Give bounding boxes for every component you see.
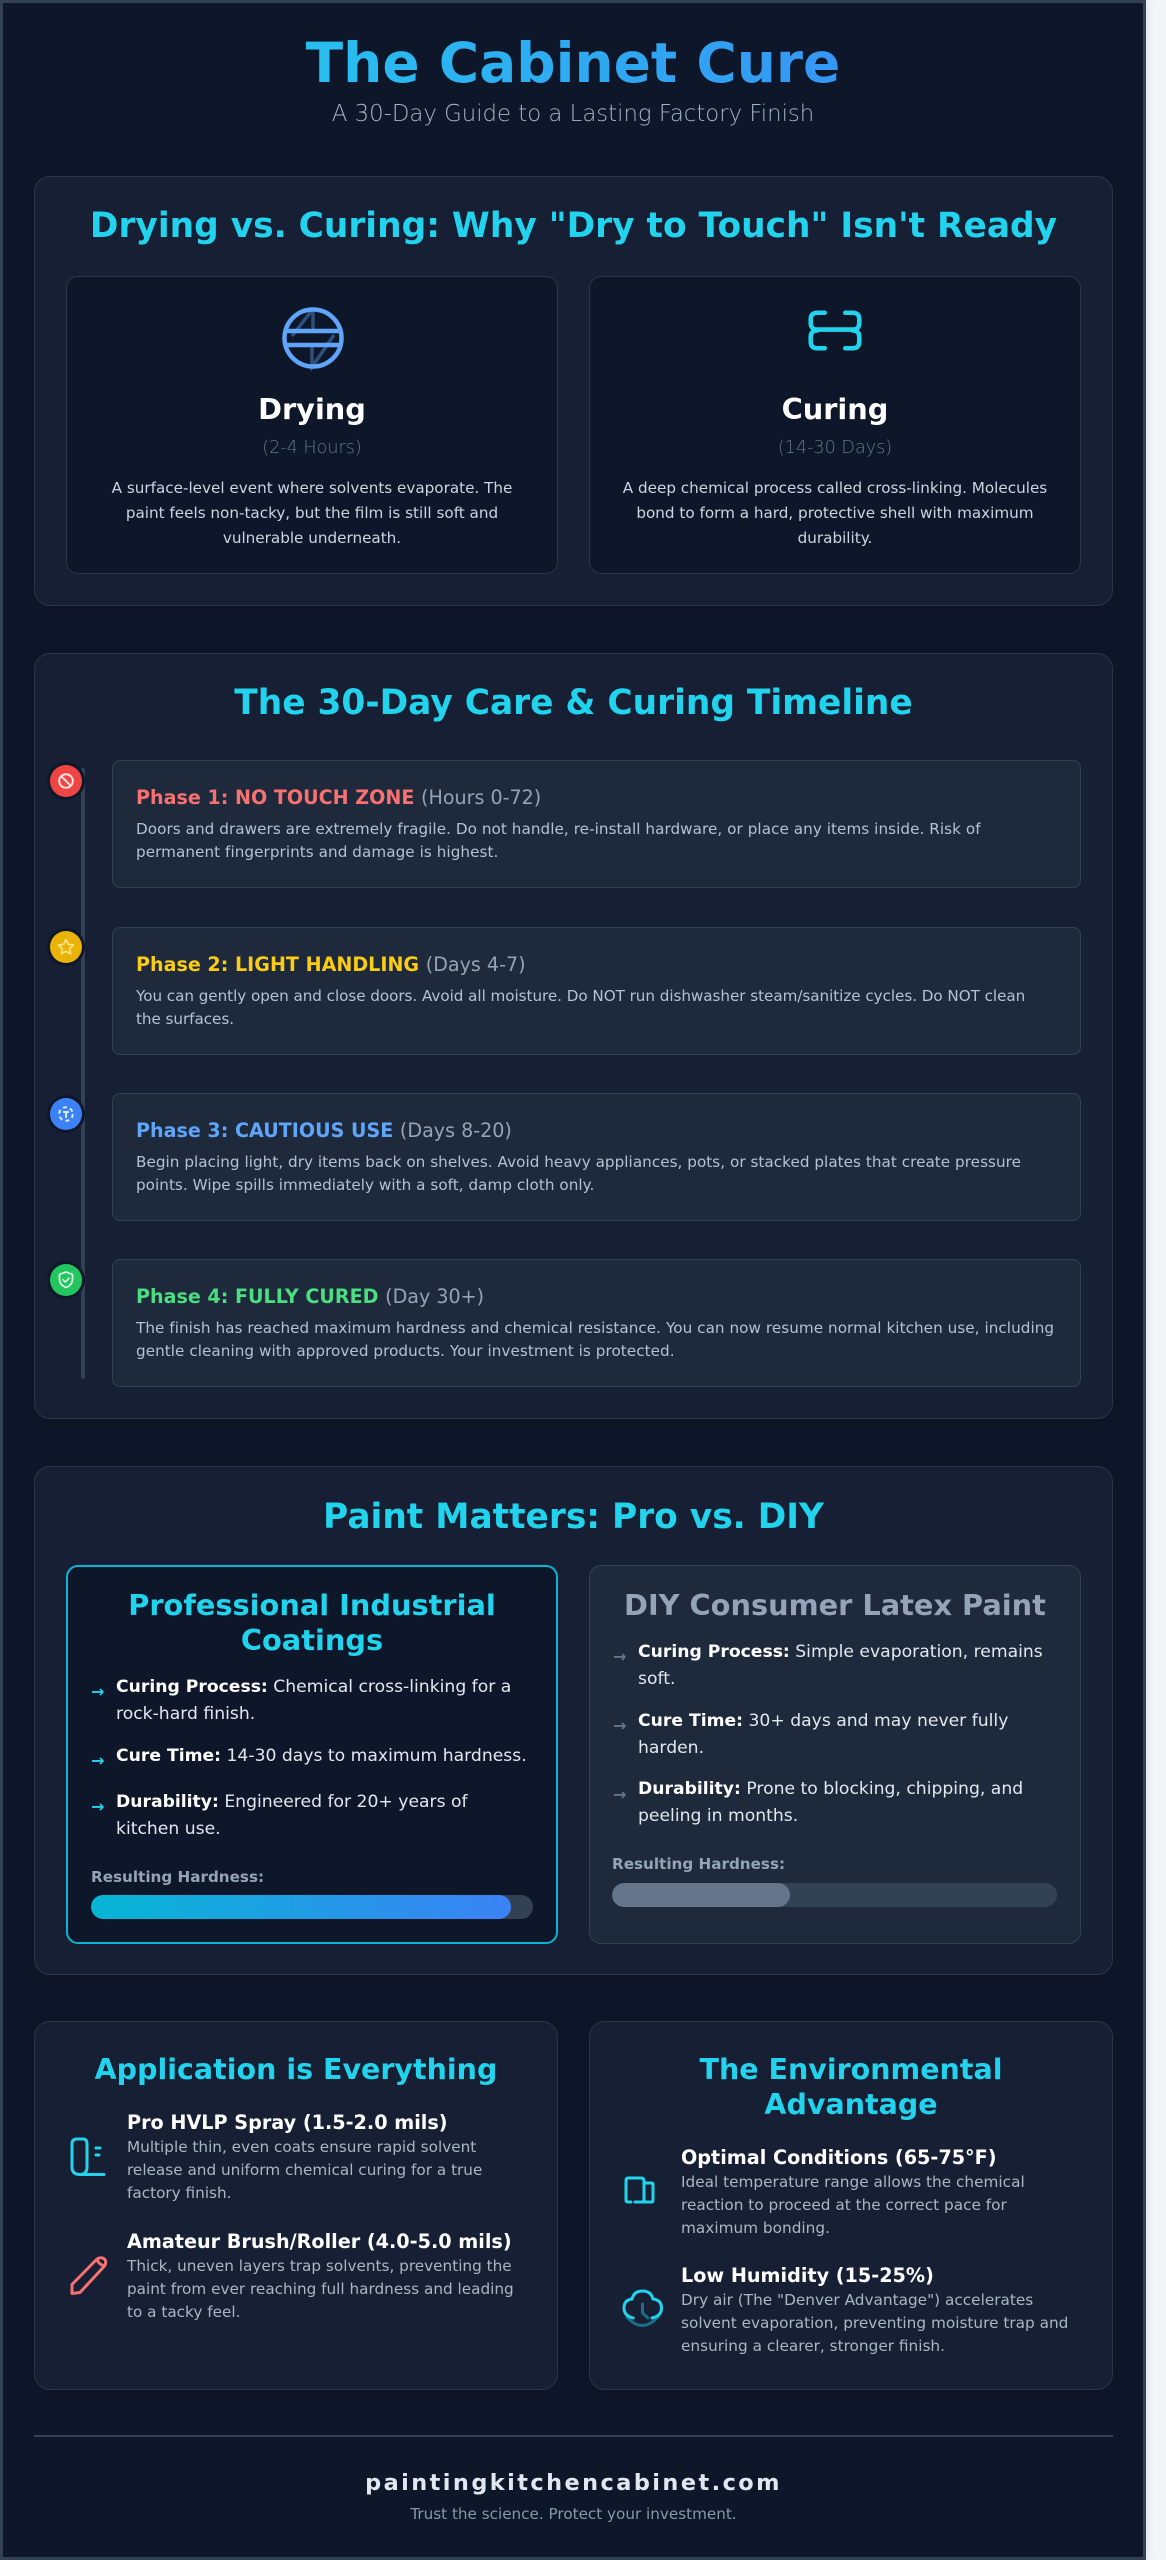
phase 2 title: Phase 2: LIGHT HANDLING (Days 4-7) <box>136 953 526 976</box>
phase 2 dot <box>50 931 82 963</box>
phase 1 text: Doors and drawers are extremely fragile. Do not handle, re-install hardware, or place any items inside. Risk of <box>136 820 981 838</box>
item text: amateur brush: to a tacky feel. <box>127 2303 240 2321</box>
bullet 1 text <box>116 1677 511 1724</box>
phase 3 text: points. Wipe spills immediately with a soft, damp cloth only. <box>136 1176 594 1194</box>
bullet 3 text: peeling in months. <box>638 1806 798 1826</box>
subtitle: A 30-Day Guide to a Lasting Factory Finish <box>332 101 814 127</box>
bullet 1 text: Curing Process: Simple evaporation, remains <box>638 1642 1043 1662</box>
item text: low humidity <box>681 2291 1068 2355</box>
item: low humidity: Low Humidity (15-25%) <box>681 2264 934 2287</box>
description: curing <box>622 479 1047 547</box>
heading: drying vs curing: Drying vs. Curing: Why "Dry to Touch" Isn't Ready <box>90 206 1057 246</box>
item text: pro HVLP: factory finish. <box>127 2184 232 2202</box>
heading: timeline: The 30-Day Care & Curing Timeline <box>234 683 913 723</box>
heading: environment: The Environmental <box>700 2053 1002 2086</box>
item text: optimal conditions: Ideal temperature range allows the chemical <box>681 2173 1025 2191</box>
item text: optimal conditions <box>681 2173 1025 2237</box>
bullet 3 text: kitchen use. <box>116 1819 221 1839</box>
description: drying <box>112 479 512 547</box>
panel: timeline <box>34 653 1113 1419</box>
item text: amateur brush <box>126 2257 514 2321</box>
footer site name: paintingkitchencabinet.com <box>365 2470 782 2496</box>
phase 1 title: Phase 1: NO TOUCH ZONE (Hours 0-72) <box>136 786 541 809</box>
phase 3 dot <box>50 1098 82 1130</box>
description: drying: paint feels non-tacky, but the film is still soft and <box>126 504 498 522</box>
card: drying <box>66 276 558 574</box>
phase 3 text: Begin placing light, dry items back on shelves. Avoid heavy appliances, pots, or stacked plates that create pressure <box>136 1153 1021 1171</box>
item text: low humidity: Dry air (The "Denver Advantage") accelerates <box>681 2291 1033 2309</box>
hardness fill 95% <box>91 1895 511 1919</box>
label: curing: Curing <box>782 392 888 426</box>
icon: dashed circle <box>58 1106 74 1122</box>
icon: cloud <box>622 2290 663 2327</box>
bullet 2: → <box>613 1716 626 1735</box>
item text: amateur brush: Thick, uneven layers trap solvents, preventing the <box>127 2257 512 2275</box>
item: optimal conditions: Optimal Conditions (65-75°F) <box>681 2146 997 2169</box>
bullet 1: → <box>91 1682 104 1701</box>
phase 2 text <box>136 987 1025 1028</box>
phase 4 card <box>112 1259 1081 1387</box>
icon: brush <box>70 2256 108 2295</box>
item: pro HVLP: Pro HVLP Spray (1.5-2.0 mils) <box>127 2111 448 2134</box>
item text: pro HVLP <box>127 2138 482 2202</box>
title: The Cabinet Cure <box>306 31 840 95</box>
item text: optimal conditions: maximum bonding. <box>681 2219 830 2237</box>
heading: professional: Professional Industrial <box>128 1588 496 1622</box>
description: curing: durability. <box>798 529 872 547</box>
hardness bar: professional <box>91 1895 533 1919</box>
bullet 3 text <box>638 1779 1023 1826</box>
heading: environment <box>700 2053 1002 2121</box>
timeline line <box>81 768 85 1379</box>
heading: professional: Coatings <box>241 1623 383 1657</box>
icon: drying <box>282 307 344 371</box>
bullet 3 text: Durability: Engineered for 20+ years of <box>116 1792 468 1812</box>
icon: spray <box>70 2138 106 2176</box>
heading: paint matters: Paint Matters: Pro vs. DIY <box>323 1497 824 1537</box>
card: curing <box>589 276 1081 574</box>
icon: star <box>58 938 74 955</box>
footer divider <box>34 2435 1113 2437</box>
bullet 1: → <box>613 1647 626 1666</box>
panel: application <box>34 2021 558 2390</box>
phase 2 card <box>112 927 1081 1055</box>
heading: environment: Advantage <box>764 2088 938 2121</box>
item text: pro HVLP: release and uniform chemical curing for a true <box>127 2161 482 2179</box>
bullet 3 text: Durability: Prone to blocking, chipping, and <box>638 1779 1023 1799</box>
icon: no entry <box>58 773 74 789</box>
phase 4 title: Phase 4: FULLY CURED (Day 30+) <box>136 1285 484 1308</box>
icon: curing <box>808 310 862 350</box>
item text: pro HVLP: Multiple thin, even coats ensure rapid solvent <box>127 2138 476 2156</box>
bullet 2 text <box>638 1711 1008 1758</box>
hardness label: DIY: Resulting Hardness: <box>612 1855 785 1873</box>
label: drying: Drying <box>258 392 366 426</box>
description: curing: bond to form a hard, protective shell with maximum <box>636 504 1034 522</box>
duration: drying: (2-4 Hours) <box>262 438 362 458</box>
description: curing: A deep chemical process called cross-linking. Molecules <box>623 479 1047 497</box>
phase 4 text <box>136 1319 1054 1360</box>
description: drying: vulnerable underneath. <box>223 529 401 547</box>
bullet 2 text: harden. <box>638 1738 704 1758</box>
duration: curing: (14-30 Days) <box>778 438 892 458</box>
hardness bar: DIY <box>612 1883 1057 1907</box>
item: amateur brush: Amateur Brush/Roller (4.0-5.0 mils) <box>127 2230 512 2253</box>
phase 1 text <box>136 820 981 861</box>
icon: temperature devices <box>624 2176 654 2204</box>
bullet 1 text <box>638 1642 1043 1689</box>
bullet 2 text: Cure Time: 14-30 days to maximum hardness. <box>116 1746 527 1766</box>
bullet 1 text: Curing Process: Chemical cross-linking for a <box>116 1677 511 1697</box>
phase 3 title: Phase 3: CAUTIOUS USE (Days 8-20) <box>136 1119 512 1142</box>
phase 2 text: the surfaces. <box>136 1010 234 1028</box>
bullet 3: → <box>91 1797 104 1816</box>
heading: professional <box>128 1588 496 1657</box>
panel: drying vs curing <box>34 176 1113 606</box>
phase 4 text: The finish has reached maximum hardness and chemical resistance. You can now resume normal kitchen use, including <box>136 1319 1054 1337</box>
phase 1 card <box>112 760 1081 888</box>
heading: DIY: DIY Consumer Latex Paint <box>624 1588 1046 1622</box>
item text: amateur brush: paint from ever reaching full hardness and leading <box>127 2280 514 2298</box>
heading: application: Application is Everything <box>95 2053 497 2086</box>
bullet 2: → <box>91 1751 104 1770</box>
bullet 3 text <box>116 1792 468 1839</box>
phase 3 text <box>136 1153 1021 1194</box>
phase 4 text: gentle cleaning with approved products. Your investment is protected. <box>136 1342 675 1360</box>
item text: optimal conditions: reaction to proceed at the correct pace for <box>681 2196 1007 2214</box>
hardness label: professional: Resulting Hardness: <box>91 1868 264 1886</box>
item text: low humidity: solvent evaporation, preventing moisture trap and <box>681 2314 1068 2332</box>
panel: paint matters <box>34 1466 1113 1975</box>
icon: shield check <box>58 1271 74 1288</box>
bullets: professional <box>91 1677 527 1839</box>
panel: environment <box>589 2021 1113 2390</box>
title <box>35 27 1111 99</box>
phase 4 dot <box>50 1264 82 1296</box>
card: professional coatings <box>66 1565 558 1944</box>
phase 1 text: permanent fingerprints and damage is highest. <box>136 843 498 861</box>
phase 1 dot <box>50 765 82 797</box>
item text: low humidity: ensuring a clearer, stronger finish. <box>681 2337 945 2355</box>
description: drying: A surface-level event where solvents evaporate. The <box>112 479 512 497</box>
phase 2 text: You can gently open and close doors. Avoid all moisture. Do NOT run dishwasher steam/sanitize cycles. Do NOT clean <box>136 987 1025 1005</box>
bullet 2 text: Cure Time: 30+ days and may never fully <box>638 1711 1008 1731</box>
bullet 3: → <box>613 1785 626 1804</box>
card: DIY latex <box>589 1565 1081 1944</box>
hardness fill 40% <box>612 1883 790 1907</box>
bullet 1 text: soft. <box>638 1669 675 1689</box>
footer tagline: Trust the science. Protect your investment. <box>410 2505 737 2523</box>
bullet 1 text: rock-hard finish. <box>116 1704 255 1724</box>
phase 3 card <box>112 1093 1081 1221</box>
bullets: DIY <box>613 1642 1043 1826</box>
